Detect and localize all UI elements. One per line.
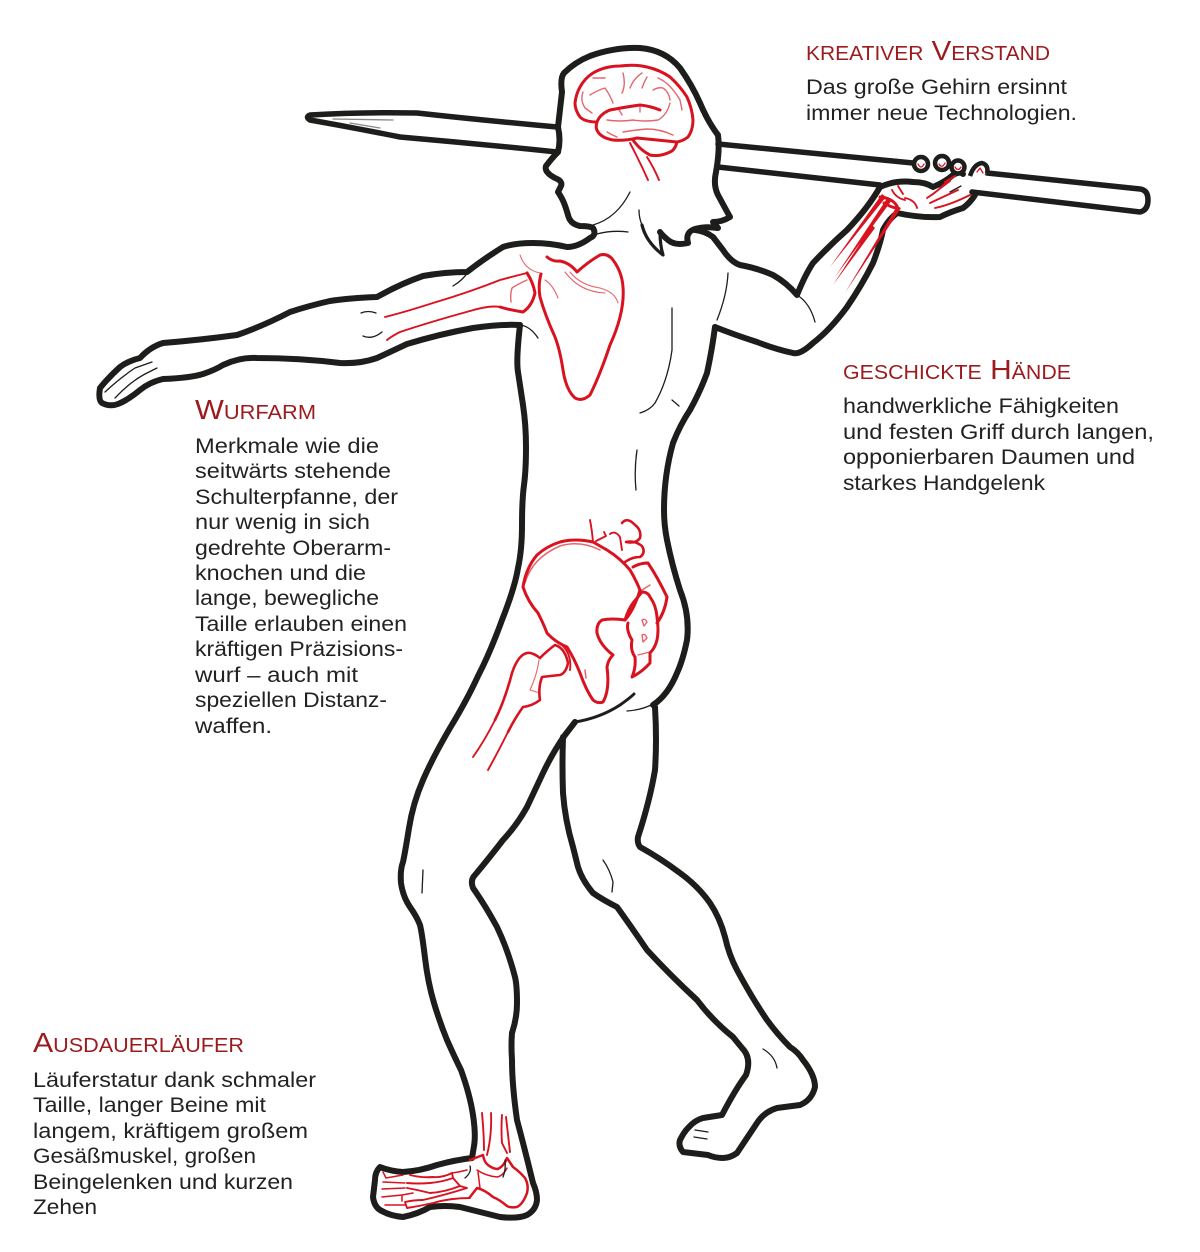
body text: immer neue Technologien. [806, 101, 1077, 125]
body text: Merkmale wie die [195, 434, 379, 458]
heading: Ausdauerläufer [33, 1027, 244, 1058]
body text [806, 75, 1077, 125]
spear [308, 113, 1148, 212]
thigh bone [473, 645, 570, 770]
figure outline: torso front and standing leg [373, 325, 653, 1218]
figure outline: raised leg and foot [562, 707, 815, 1158]
body text: starkes Handgelenk [843, 471, 1045, 495]
body text: und festen Griff durch langen, [843, 420, 1154, 444]
text block: Ausdauerläufer [33, 1027, 316, 1219]
body text: seitwärts stehende [195, 459, 391, 483]
body text: Taille erlauben einen [195, 612, 407, 636]
body text [194, 434, 407, 738]
figure outline: head and hair [558, 48, 730, 255]
icon: fingers gripping the spear [914, 156, 987, 176]
body text: Zehen [33, 1195, 97, 1219]
text block: kreativer Verstand [806, 35, 1077, 125]
body text: knochen und die [195, 561, 366, 585]
body text [843, 394, 1154, 495]
heading: kreativer Verstand [806, 35, 1050, 66]
upper arm bone [385, 273, 535, 340]
body text: Das große Gehirn ersinnt [806, 75, 1067, 99]
body text: Gesäßmuskel, großen [33, 1144, 256, 1168]
heading: geschickte Hände [843, 354, 1071, 385]
brain [575, 65, 693, 180]
figure outline: face, shoulder and throwing arm [99, 152, 594, 405]
body text: lange, bewegliche [195, 586, 379, 610]
figure outline: back and buttock [635, 273, 728, 705]
forearm and hand bones [830, 176, 970, 293]
body text: wurf – auch mit [194, 663, 358, 687]
pelvis [523, 540, 640, 703]
body text: handwerkliche Fähigkeiten [843, 394, 1119, 418]
text block: Wurfarm [194, 394, 407, 738]
body text: gedrehte Oberarm- [195, 536, 391, 560]
body text: speziellen Distanz- [195, 688, 387, 712]
body text: Beingelenken und kurzen [33, 1170, 293, 1194]
heading: Wurfarm [195, 394, 316, 425]
body text: Läuferstatur dank schmaler [33, 1068, 316, 1092]
body text: Schulterpfanne, der [195, 485, 398, 509]
body text: waffen. [194, 714, 272, 738]
body text: kräftigen Präzisions- [195, 637, 403, 661]
body text: nur wenig in sich [195, 510, 370, 534]
body text [33, 1068, 316, 1219]
body text: Taille, langer Beine mit [33, 1093, 266, 1117]
shoulder blade [520, 255, 623, 399]
figure outline: carrying arm and hand [695, 173, 975, 353]
foot and ankle bones [382, 1113, 528, 1208]
body text: langem, kräftigem großem [33, 1119, 308, 1143]
body text: opponierbaren Daumen und [843, 445, 1135, 469]
sacrum and lumbar vertebrae [590, 520, 667, 677]
text block: geschickte Hände [843, 354, 1154, 495]
